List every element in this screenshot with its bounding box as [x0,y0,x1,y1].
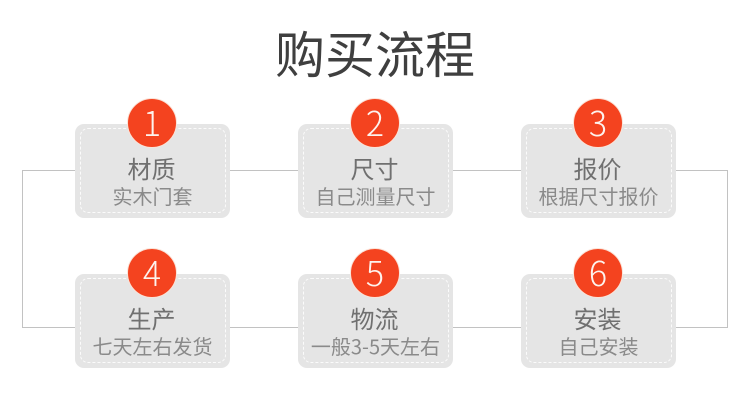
caption: installation: 自己安装 [558,331,638,360]
caption: logistics: 一般3-5天左右 [311,331,440,360]
card 2: size [298,124,453,218]
step number 2 [350,98,400,148]
step number 6 [573,248,623,298]
step number 4: 4 [143,247,161,296]
step number 1: 1 [143,97,161,146]
heading: quote: 报价 [574,150,622,185]
step number 3 [573,98,623,148]
caption: quote: 根据尺寸报价 [538,181,658,210]
step number 2: 2 [366,97,384,146]
step number 1 [127,98,177,148]
caption: material: 实木门套 [112,181,192,210]
card 6: installation [521,274,676,368]
card 5: logistics [298,274,453,368]
heading: installation: 安装 [574,300,622,335]
heading: size: 尺寸 [350,150,398,185]
title: 购买流程 [275,16,475,88]
step number 5 [350,248,400,298]
card 4: production [75,274,230,368]
heading: material: 材质 [128,150,176,185]
heading: logistics: 物流 [350,300,398,335]
step number 4 [127,248,177,298]
caption: production: 七天左右发货 [92,331,212,360]
heading: production: 生产 [128,300,176,335]
caption: size: 自己测量尺寸 [316,181,436,210]
step number 3: 3 [589,97,607,146]
connector line frame [22,170,728,328]
step number 5: 5 [366,247,384,296]
card 1: material [75,124,230,218]
card 3: quote [521,124,676,218]
step number 6: 6 [589,247,607,296]
